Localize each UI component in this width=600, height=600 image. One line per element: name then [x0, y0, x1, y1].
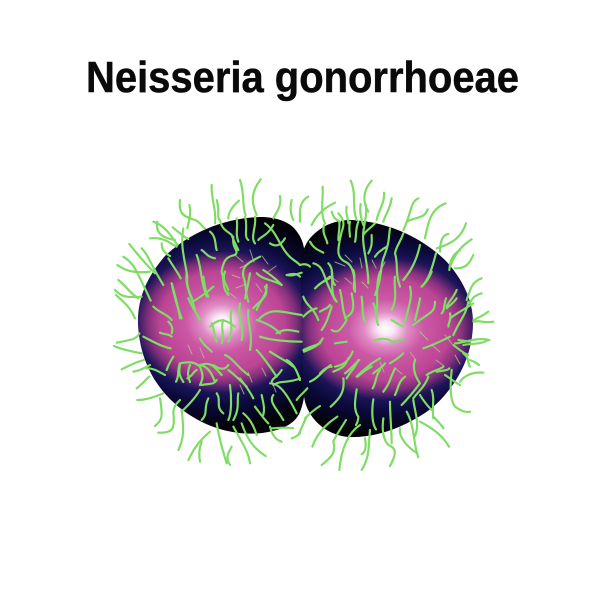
diagram: dividing diplococcus [114, 179, 493, 470]
fine pale pili near poles [188, 250, 460, 394]
pili: bottom-left quadrant [114, 333, 300, 465]
pili: centre of left coccus [168, 270, 320, 382]
left coccus body [138, 217, 305, 434]
pili: bottom-right quadrant [297, 321, 493, 470]
title: Neisseria gonorrhoeae [86, 53, 519, 102]
pili: top-right quadrant [300, 181, 488, 320]
pili: top-left quadrant [115, 179, 300, 320]
right coccus body [301, 220, 473, 437]
pili: centre of right coccus [318, 270, 470, 378]
